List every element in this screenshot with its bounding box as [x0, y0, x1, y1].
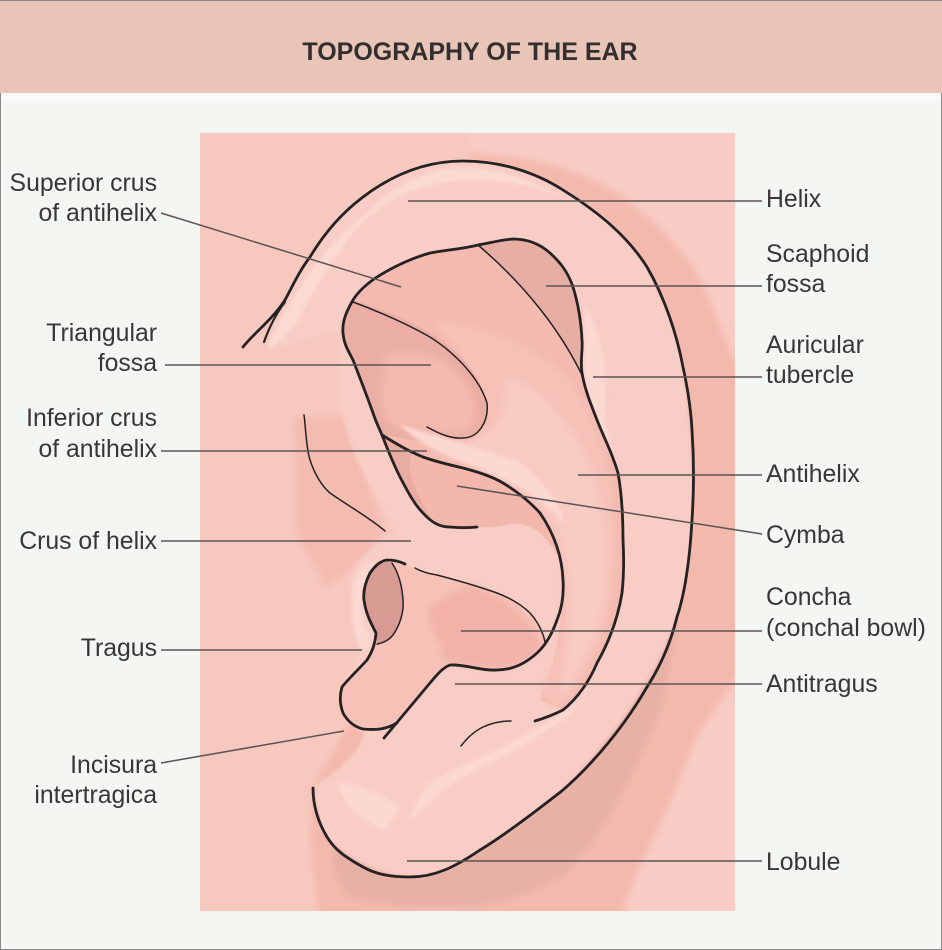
leader lines [161, 201, 762, 861]
title banner [0, 1, 942, 93]
tragus inner line [377, 563, 403, 644]
concha outline [382, 435, 563, 738]
tragus fill [364, 562, 403, 644]
left labels: Inferior crus [26, 405, 157, 432]
antihelix lighter core [430, 380, 606, 700]
scaphoid fossa dark corner [478, 239, 582, 373]
left labels: Triangular [46, 320, 157, 347]
cymba fill [382, 435, 560, 560]
left labels: Incisura [70, 752, 157, 779]
lobule highlight [337, 783, 400, 830]
helix second prong [264, 302, 285, 342]
right labels: Antihelix [766, 461, 860, 488]
left labels [10, 170, 158, 809]
ear outlines [243, 161, 694, 877]
left labels: Superior crus [10, 170, 157, 197]
concha bowl [340, 562, 545, 729]
scaphoid and antihelix outline [343, 239, 624, 721]
cymba shadow [382, 435, 432, 520]
triangular fossa line [353, 302, 487, 438]
helix outline [243, 161, 694, 877]
lobule streak [407, 703, 577, 822]
concha deep centre [429, 585, 543, 668]
right labels: tubercle [766, 362, 854, 389]
right labels: Concha [766, 584, 852, 611]
right labels: Helix [766, 186, 822, 213]
concha line [415, 568, 545, 642]
left labels: of antihelix [38, 436, 158, 463]
panel: ear illustration [200, 133, 745, 925]
inferior crus highlight [400, 425, 565, 525]
triangular fossa centre [382, 352, 476, 433]
right labels [766, 186, 926, 876]
ear shading [293, 133, 745, 925]
right labels: Scaphoid [766, 241, 869, 268]
crus line [304, 415, 385, 531]
helix highlight [267, 168, 563, 350]
triangular fossa [343, 300, 487, 445]
right labels: Auricular [766, 332, 864, 359]
scaphoid and fossa fill [343, 239, 624, 710]
right labels: Cymba [766, 522, 845, 549]
left labels: Tragus [81, 635, 157, 662]
right labels: (conchal bowl) [766, 615, 926, 642]
ear base [267, 161, 693, 877]
right labels: Antitragus [766, 671, 878, 698]
antitragus line [461, 721, 511, 746]
left labels: of antihelix [38, 200, 158, 227]
right labels: Lobule [766, 849, 840, 876]
title banner: TOPOGRAPHY OF THE EAR [302, 38, 638, 66]
left labels: fossa [98, 350, 157, 377]
antihelix streak [584, 305, 618, 500]
left labels: intertragica [34, 782, 157, 809]
right labels: fossa [766, 271, 825, 298]
tragus highlight [352, 561, 378, 650]
left labels: Crus of helix [19, 528, 158, 555]
antihelix light area [430, 322, 616, 710]
scaphoid inner line [478, 245, 582, 375]
tragus outline [340, 560, 405, 729]
